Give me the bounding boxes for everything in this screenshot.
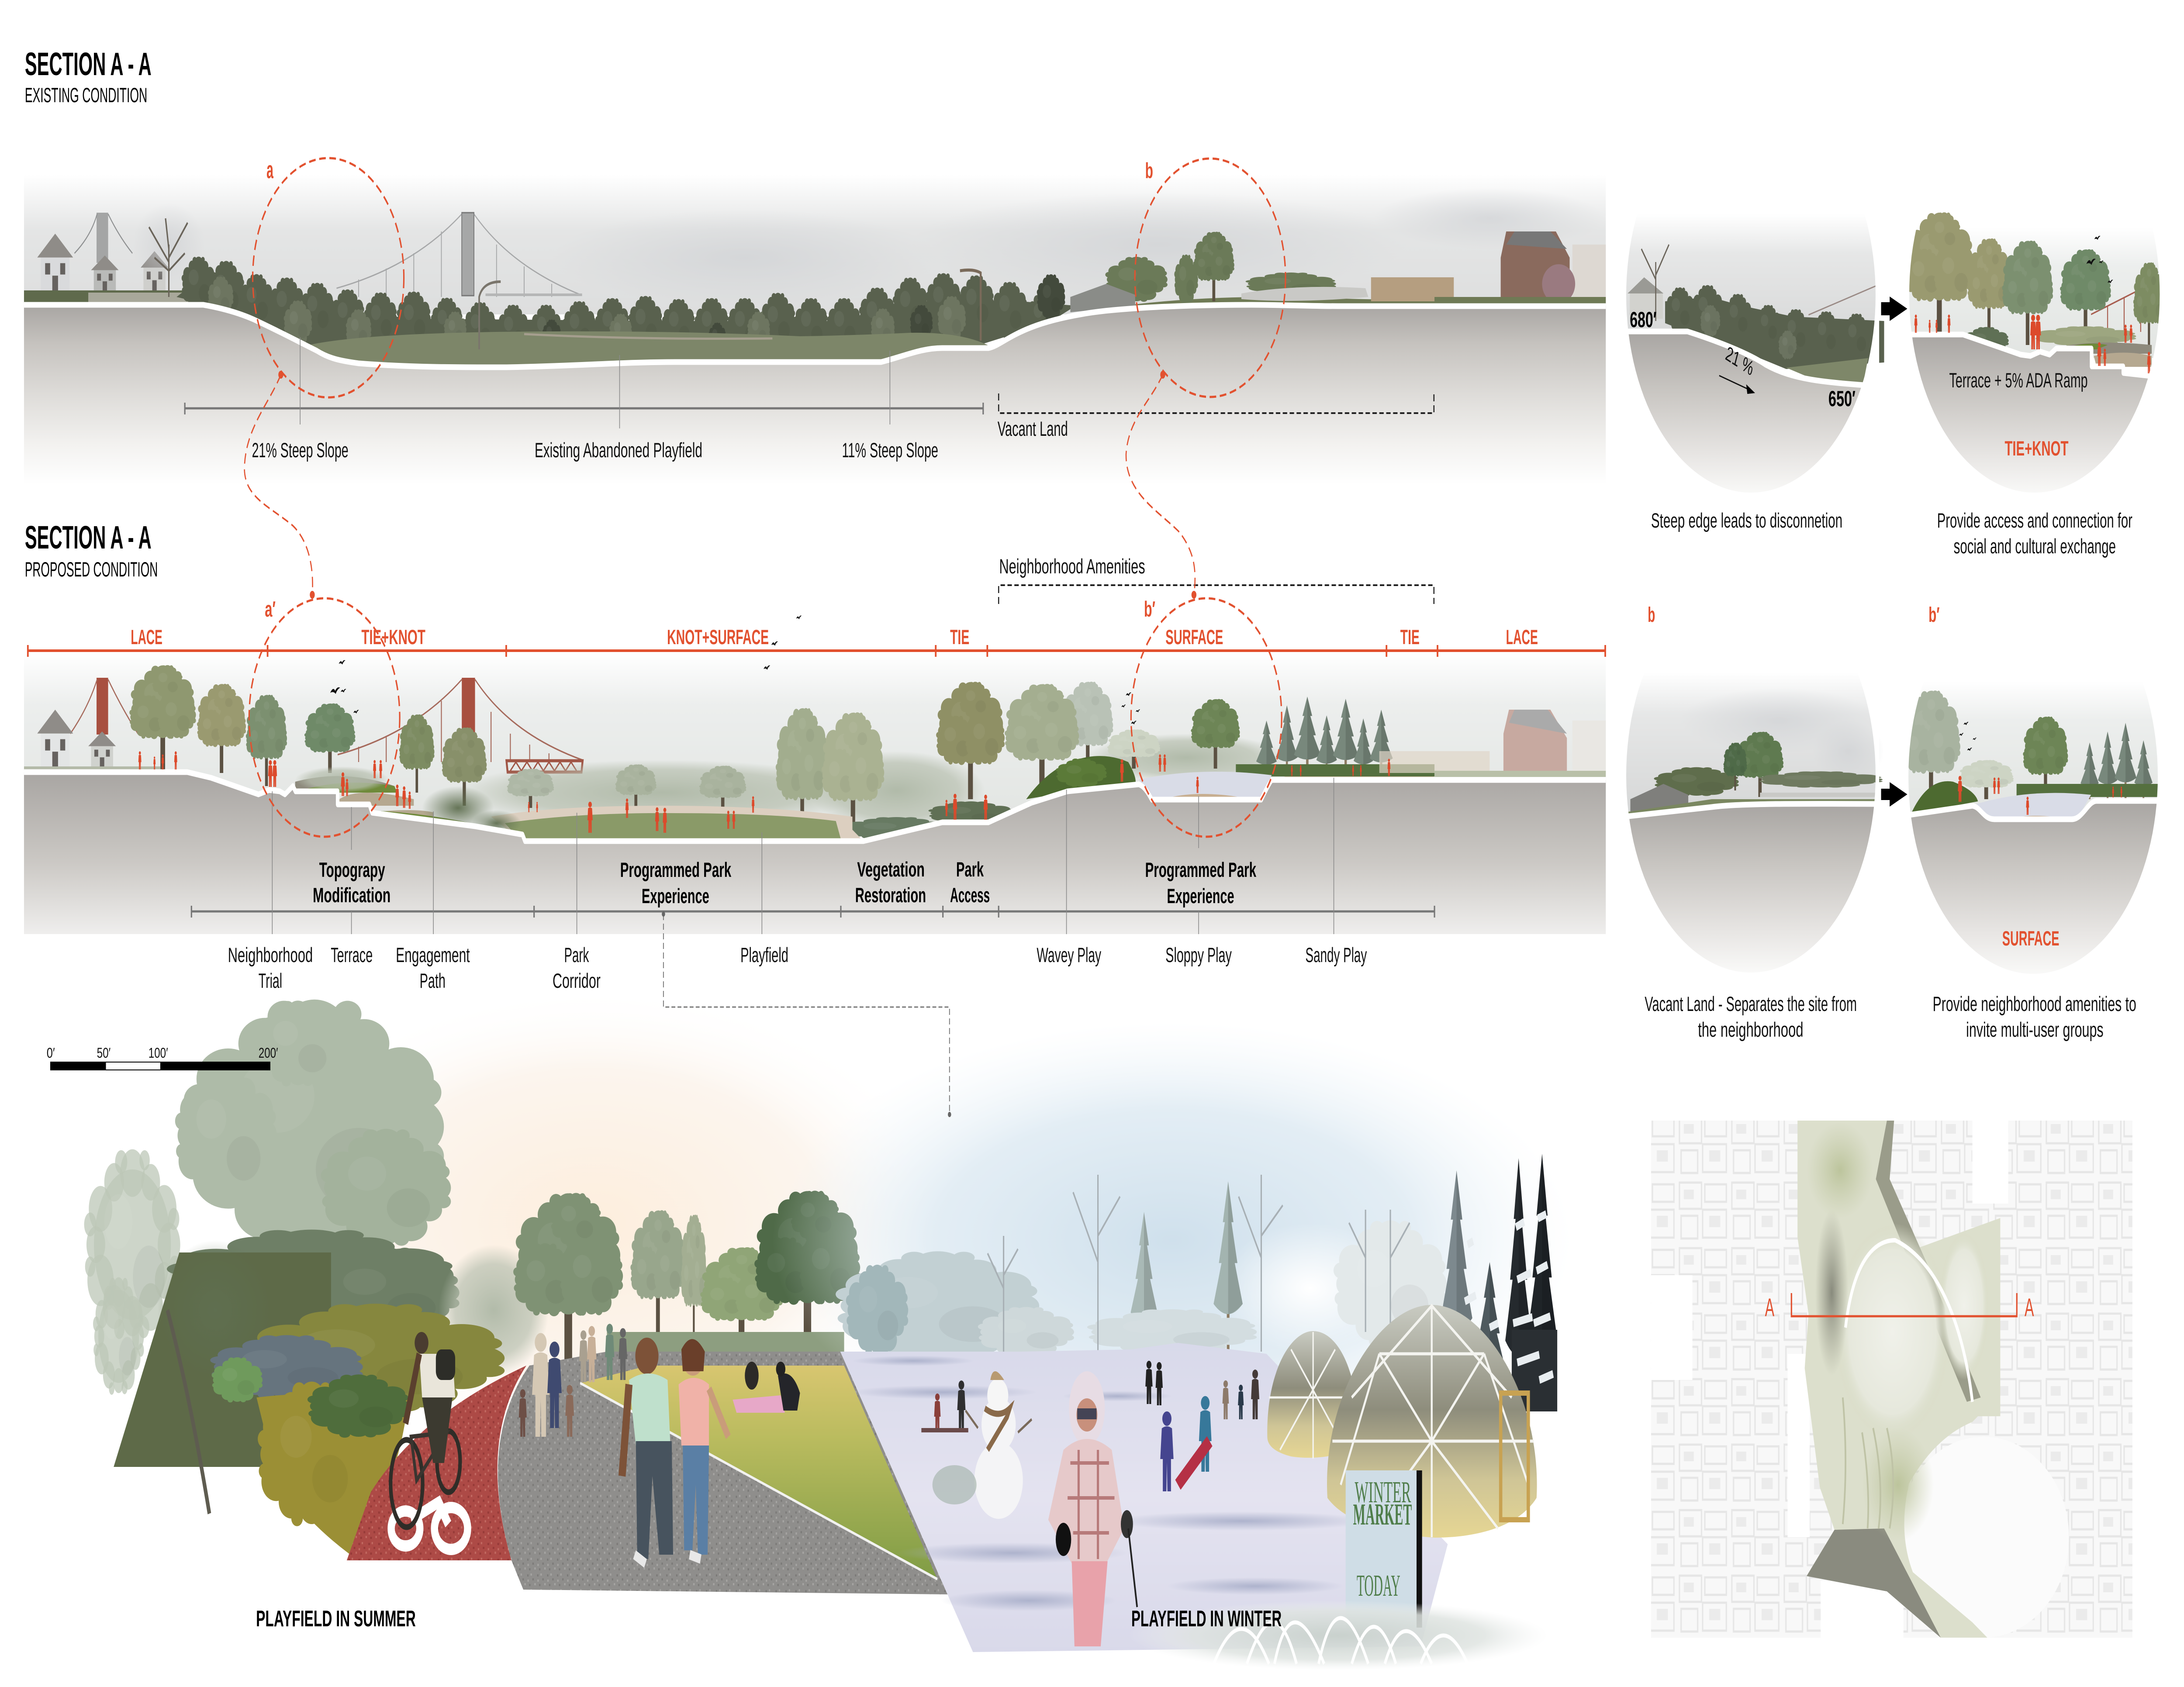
caption a prime <box>1937 509 2132 558</box>
houses left, existing <box>37 234 168 290</box>
neighbourhood parcels <box>1651 1121 2132 1638</box>
walking couple <box>622 1338 728 1563</box>
detail a: a <box>1648 118 1655 142</box>
grass field, existing <box>309 331 988 365</box>
strategy bar: lace, tie, knot, surface: TIE <box>1400 626 1420 649</box>
winter market sign: MARKET <box>1353 1497 1412 1532</box>
elevations and slope arrow: 650′ <box>1828 386 1856 411</box>
summer sky <box>235 987 952 1459</box>
element labels: proposed section: Playfield <box>740 944 788 967</box>
perspective: playfield in summer <box>84 987 952 1594</box>
element labels: proposed section <box>228 944 1367 993</box>
element labels: proposed section: Sandy Play <box>1306 944 1367 967</box>
icon: arrow a to a prime <box>1881 297 1908 321</box>
picnic <box>733 1362 800 1413</box>
winter sky <box>772 1022 1572 1459</box>
frosted trees <box>836 1181 1447 1360</box>
element labels: proposed section: Neighborhood <box>228 944 313 967</box>
gray walking path <box>498 1352 949 1594</box>
bridge towers, existing <box>75 213 582 297</box>
caption b <box>1645 993 1857 1042</box>
snow field <box>840 1343 1448 1652</box>
icon: arrow b to b prime <box>1881 782 1908 807</box>
bold labels: proposed section: Restoration <box>855 884 926 907</box>
label: 21% steep slope: 21% Steep Slope <box>252 439 349 462</box>
detail callouts: dashed circles and connectors: a′ <box>265 597 276 621</box>
key plan map <box>1651 1121 2132 1638</box>
strategy bar: lace, tie, knot, surface: KNOT+SURFACE <box>667 626 769 649</box>
label: vacant land: Vacant Land <box>998 417 1068 441</box>
element labels: proposed section: Path <box>420 969 446 993</box>
caption a prime: Provide access and connection for <box>1937 509 2132 532</box>
icon: bike lane symbol <box>391 1502 467 1549</box>
detail callouts: dashed circles and connectors: b <box>1145 159 1153 183</box>
caption b: the neighborhood <box>1698 1018 1803 1042</box>
detail callouts: dashed circles and connectors: b′ <box>1144 597 1155 621</box>
element labels: proposed section: Terrace <box>331 944 373 967</box>
ground cut, proposed <box>24 772 1606 934</box>
elevations and slope arrow: 680′ <box>1630 307 1656 332</box>
neighborhood amenities bracket: Neighborhood Amenities <box>999 555 1145 578</box>
terraces <box>295 766 522 836</box>
section cut line A-A <box>1765 1293 2034 1322</box>
flower shrubs <box>210 1304 505 1555</box>
bold labels: proposed section: Programmed Park <box>620 859 731 882</box>
strategy bar: lace, tie, knot, surface: SURFACE <box>1165 626 1223 649</box>
snowman <box>933 1371 1032 1519</box>
perspective: playfield in winter <box>772 1022 1572 1670</box>
heading: proposed condition: SECTION A - A <box>25 520 152 556</box>
scale bar: 0′ <box>47 1045 55 1061</box>
detail a <box>1608 98 1884 532</box>
birds b prime <box>1959 722 1977 751</box>
detail callouts: dashed circles and connectors <box>245 156 1286 837</box>
family group <box>519 1324 627 1437</box>
detail b: b <box>1648 603 1655 627</box>
annotation bracket: existing <box>185 338 1434 428</box>
strategy bar: lace, tie, knot, surface: LACE <box>1506 626 1538 649</box>
dark snowy conifers <box>1441 1154 1557 1411</box>
detail callouts: dashed circles and connectors: a <box>266 156 273 183</box>
caption a prime: social and cultural exchange <box>1954 535 2116 558</box>
detail b prime: b′ <box>1928 603 1939 627</box>
scale bar: 100′ <box>149 1045 168 1061</box>
trees: proposed section <box>129 665 1240 838</box>
scale bar <box>47 1045 278 1070</box>
birds a prime <box>2086 236 2113 283</box>
label surface: SURFACE <box>2002 927 2060 950</box>
frost grasses <box>1128 1601 1548 1670</box>
winter market sign: TODAY <box>1357 1569 1400 1603</box>
heading: existing condition: SECTION A - A <box>25 46 152 83</box>
section drawing: existing condition <box>24 175 1606 485</box>
red bike path <box>347 1366 526 1560</box>
element labels: proposed section: Park <box>564 944 589 967</box>
houses right, existing <box>1501 231 1570 301</box>
vacant land and neighbourhood, existing <box>1070 297 1462 314</box>
scale bar: 50′ <box>97 1045 111 1061</box>
bold labels: proposed section: Vegetation <box>857 858 925 881</box>
detail a prime: a′ <box>1929 118 1939 142</box>
caption: playfield in summer: PLAYFIELD IN SUMMER <box>256 1607 416 1632</box>
lawn wedge <box>114 1252 331 1467</box>
big tree <box>84 1000 460 1395</box>
bold labels: proposed section: Modification <box>313 884 390 907</box>
detail a prime <box>1892 87 2177 558</box>
large dome <box>1327 1305 1537 1538</box>
label tie knot: TIE+KNOT <box>2004 437 2068 460</box>
park plan <box>1797 1121 2000 1638</box>
element labels: proposed section: Wavey Play <box>1037 944 1101 967</box>
skate bowl <box>1139 772 1272 797</box>
bold labels: proposed section <box>313 858 1256 908</box>
bold labels: proposed section: Experience <box>642 885 709 908</box>
label: existing abandoned playfield: Existing Abandoned Playfield <box>535 439 702 462</box>
bold labels: proposed section: Park <box>956 858 984 881</box>
faded neighbourhood right <box>1503 710 1567 773</box>
dashed leader to perspective <box>662 911 951 1117</box>
caption b prime: invite multi-user groups <box>1966 1018 2104 1042</box>
bold labels: proposed section: Programmed Park <box>1145 859 1256 882</box>
strategy bar: lace, tie, knot, surface: TIE+KNOT <box>361 626 425 649</box>
red suspension bridge <box>70 678 583 772</box>
elevations and slope arrow: 21 % <box>1724 342 1756 380</box>
heading: proposed condition: PROPOSED CONDITION <box>25 558 158 581</box>
small dome <box>1267 1331 1358 1459</box>
red figures <box>138 751 1390 833</box>
ground cut, existing <box>24 305 1606 485</box>
bare tree <box>133 203 205 286</box>
heading: proposed condition <box>25 520 158 581</box>
label terrace ramp: Terrace + 5% ADA Ramp <box>1949 369 2088 392</box>
background trees <box>439 1190 860 1376</box>
winter market sign: WINTER <box>1355 1475 1411 1509</box>
circle: terrace and ramp <box>1892 87 2177 515</box>
cyclist <box>390 1332 460 1527</box>
strategy bar: lace, tie, knot, surface: LACE <box>131 626 162 649</box>
caption a: Steep edge leads to disconnetion <box>1651 509 1842 532</box>
detail b <box>1608 578 1884 1042</box>
scale bar: 200′ <box>259 1045 278 1061</box>
caption b prime <box>1933 993 2136 1042</box>
element labels: proposed section: Corridor <box>553 969 601 993</box>
element labels: proposed section: Sloppy Play <box>1165 944 1232 967</box>
caption b prime: Provide neighborhood amenities to <box>1933 993 2136 1016</box>
label: 11% steep slope: 11% Steep Slope <box>842 439 938 462</box>
street lamp <box>479 282 501 349</box>
detail b prime <box>1892 579 2177 1042</box>
annotation bracket: proposed <box>191 778 1434 934</box>
bold labels: proposed section: Topograpy <box>319 859 385 882</box>
bold labels: proposed section: Experience <box>1167 885 1234 908</box>
section cut line A-A: A <box>2025 1294 2034 1322</box>
section cut line A-A: A <box>1765 1294 1775 1322</box>
element labels: proposed section: Trial <box>259 969 282 993</box>
bold labels: proposed section: Access <box>950 884 990 907</box>
park lawn <box>491 806 864 841</box>
elevations and slope arrow <box>1630 307 1856 411</box>
neighborhood amenities bracket <box>999 555 1434 604</box>
distant misty vegetation <box>455 734 1286 830</box>
caption b: Vacant Land - Separates the site from <box>1645 993 1857 1016</box>
tree band <box>176 257 1076 355</box>
heading: existing condition <box>25 46 152 107</box>
circle: vacant land <box>1608 578 1884 983</box>
circle: existing steep edge <box>1608 98 1884 515</box>
section drawing: proposed condition <box>24 653 1606 934</box>
sledding figures <box>921 1361 1259 1491</box>
grass meadow <box>580 1366 937 1579</box>
strategy bar: lace, tie, knot, surface: TIE <box>950 626 969 649</box>
heading: existing condition: EXISTING CONDITION <box>25 84 147 107</box>
faded neighbourhood left <box>37 710 73 766</box>
circle: skate bowl surface <box>1892 579 2177 987</box>
girl in plaid coat <box>1048 1371 1137 1646</box>
caption: playfield in winter: PLAYFIELD IN WINTER <box>1131 1607 1282 1632</box>
winter market sign <box>1346 1470 1422 1628</box>
hedges and mounds <box>1236 764 1434 776</box>
spruce row <box>1256 697 1393 777</box>
birds: proposed section <box>330 616 1140 724</box>
element labels: proposed section: Engagement <box>396 944 470 967</box>
strategy bar: lace, tie, knot, surface <box>28 626 1605 657</box>
